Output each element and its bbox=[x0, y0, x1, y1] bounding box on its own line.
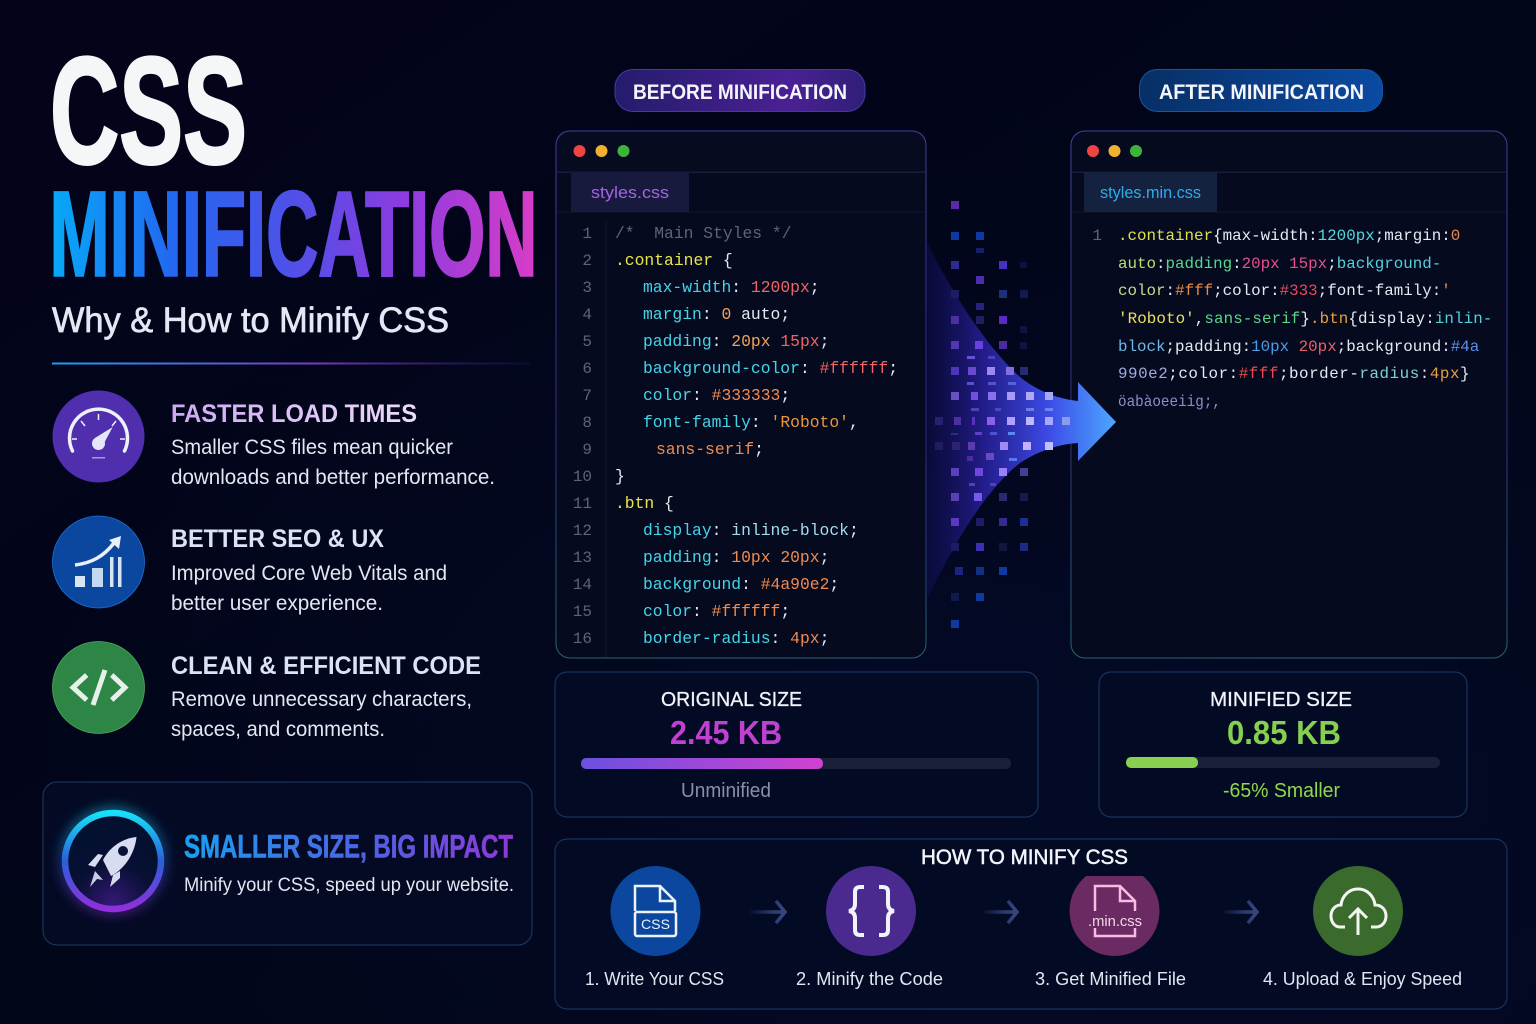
code listing: } bbox=[615, 656, 625, 675]
arrow bbox=[1223, 901, 1257, 923]
step 3: get minified file bbox=[1036, 876, 1186, 985]
subtitle: Why & How to Minify CSS bbox=[52, 301, 449, 340]
icon: rocket in ring bbox=[64, 812, 162, 910]
progress bar bbox=[1126, 757, 1440, 768]
step 2: minify the code bbox=[796, 866, 943, 989]
line numbers: 14 bbox=[573, 576, 592, 594]
code listing: display: inline-block; bbox=[643, 521, 859, 540]
code listing: padding: 10px 20px; bbox=[643, 548, 829, 567]
title: CSS: CSS bbox=[50, 26, 247, 196]
panel: minified code window bbox=[1071, 131, 1507, 658]
code listing: padding: 20px 15px; bbox=[643, 332, 829, 351]
callout: smaller size, big impact bbox=[43, 782, 532, 945]
file tab: styles.css bbox=[591, 183, 669, 202]
line numbers: 10 bbox=[573, 468, 592, 486]
description: Improved Core Web Vitals and bbox=[171, 562, 447, 585]
label: MINIFIED SIZE bbox=[1210, 688, 1352, 711]
badge: before minification bbox=[615, 70, 865, 112]
icon: growth chart bbox=[52, 516, 144, 608]
line numbers: 12 bbox=[573, 522, 592, 540]
step 4: upload and enjoy speed bbox=[1263, 866, 1462, 989]
caption: Unminified bbox=[681, 780, 771, 802]
minified code bbox=[1118, 227, 1492, 411]
line numbers: 5 bbox=[582, 333, 592, 351]
minified code: 'Roboto',sans-serif}.btn{display:inlin- bbox=[1118, 310, 1492, 328]
line numbers: 7 bbox=[582, 387, 592, 405]
arrow bbox=[983, 901, 1017, 923]
window controls bbox=[1087, 145, 1142, 157]
minified code: öabàoeeiig;, bbox=[1118, 393, 1221, 411]
code listing: .btn { bbox=[615, 494, 674, 513]
heading: CLEAN & EFFICIENT CODE bbox=[171, 652, 481, 680]
panel: original code window bbox=[556, 131, 926, 675]
code listing bbox=[615, 224, 898, 675]
code listing: color: #333333; bbox=[643, 386, 790, 405]
window controls bbox=[574, 145, 630, 157]
description bbox=[171, 436, 495, 489]
step 4: upload and enjoy speed: 4. Upload & Enjoy Speed bbox=[1263, 968, 1462, 989]
code listing: max-width: 1200px; bbox=[643, 278, 820, 297]
icon: speedometer bbox=[52, 390, 144, 482]
heading: FASTER LOAD TIMES bbox=[171, 400, 417, 428]
line numbers: 2 bbox=[582, 252, 592, 270]
caption: -65% Smaller bbox=[1223, 780, 1340, 802]
code listing: border-radius: 4px; bbox=[643, 629, 829, 648]
panel: how to minify css bbox=[555, 839, 1507, 1009]
badge: after minification: AFTER MINIFICATION bbox=[1159, 80, 1364, 104]
code listing: font-family: 'Roboto', bbox=[643, 413, 859, 432]
line numbers: 8 bbox=[582, 414, 592, 432]
line numbers: 15 bbox=[573, 603, 592, 621]
step 1: write your css: CSS bbox=[641, 916, 670, 932]
progress bar bbox=[581, 758, 1011, 769]
label: ORIGINAL SIZE bbox=[661, 688, 802, 711]
file tab: styles.min.css bbox=[1100, 183, 1201, 202]
benefit: clean and efficient code bbox=[52, 642, 481, 741]
code listing: /* Main Styles */ bbox=[615, 224, 792, 243]
callout heading: SMALLER SIZE, BIG IMPACT bbox=[184, 828, 513, 864]
step 2: minify the code: 2. Minify the Code bbox=[796, 968, 943, 989]
title: MINIFICATION: MINIFICATION bbox=[50, 166, 538, 302]
benefit: better seo and ux bbox=[52, 516, 447, 615]
line numbers: 13 bbox=[573, 549, 592, 567]
description bbox=[171, 562, 447, 615]
code listing: } bbox=[615, 467, 625, 486]
description: downloads and better performance. bbox=[171, 466, 495, 489]
code listing: background: #4a90e2; bbox=[643, 575, 839, 594]
panel: original size bbox=[555, 672, 1038, 817]
arrow bbox=[750, 901, 785, 923]
line number: 1 bbox=[1092, 227, 1102, 245]
line numbers: 3 bbox=[582, 279, 592, 297]
file tab bbox=[571, 172, 689, 212]
description: Smaller CSS files mean quicker bbox=[171, 436, 453, 459]
panel heading: HOW TO MINIFY CSS bbox=[921, 845, 1128, 869]
heading: BETTER SEO & UX bbox=[171, 525, 384, 553]
code listing: color: #ffffff; bbox=[643, 602, 790, 621]
code listing: margin: 0 auto; bbox=[643, 305, 790, 324]
icon: code brackets bbox=[52, 642, 144, 734]
description: spaces, and comments. bbox=[171, 718, 385, 741]
value: 0.85 KB bbox=[1227, 714, 1341, 751]
description: better user experience. bbox=[171, 592, 383, 615]
description: Remove unnecessary characters, bbox=[171, 688, 472, 711]
step 1: write your css bbox=[585, 866, 724, 989]
line numbers: 11 bbox=[573, 495, 592, 513]
badge: before minification: BEFORE MINIFICATION bbox=[633, 80, 847, 104]
line numbers: 16 bbox=[573, 630, 592, 648]
minified code: 990e2;color:#fff;border-radius:4px} bbox=[1118, 365, 1470, 383]
code listing: sans-serif; bbox=[656, 440, 764, 459]
code listing: .container { bbox=[615, 251, 733, 270]
minified code: block;padding:10px 20px;background:#4a bbox=[1118, 338, 1479, 356]
file tab bbox=[1084, 172, 1217, 212]
line numbers bbox=[573, 225, 592, 648]
minified code: color:#fff;color:#333;font-family:' bbox=[1118, 282, 1451, 300]
panel: minified size bbox=[1099, 672, 1467, 817]
compressed pixel particles bbox=[935, 201, 1070, 628]
step 3: get minified file: 3. Get Minified File bbox=[1035, 968, 1186, 989]
line numbers: 9 bbox=[582, 441, 592, 459]
minified code: auto:padding:20px 15px;background- bbox=[1118, 255, 1441, 273]
line numbers: 1 bbox=[582, 225, 592, 243]
step 3: get minified file: .min.css bbox=[1088, 913, 1142, 930]
minified code: .container{max-width:1200px;margin:0 bbox=[1118, 227, 1460, 245]
line numbers: 6 bbox=[582, 360, 592, 378]
code listing: background-color: #ffffff; bbox=[643, 359, 898, 378]
line numbers: 4 bbox=[582, 306, 592, 324]
step 1: write your css: 1. Write Your CSS bbox=[585, 968, 724, 989]
value: 2.45 KB bbox=[670, 714, 782, 751]
title block bbox=[50, 26, 538, 364]
benefit: faster load times bbox=[52, 390, 495, 489]
description bbox=[171, 688, 472, 741]
arrow: minification funnel bbox=[926, 201, 1116, 628]
callout text: Minify your CSS, speed up your website. bbox=[184, 874, 514, 896]
badge: after minification bbox=[1140, 70, 1382, 112]
